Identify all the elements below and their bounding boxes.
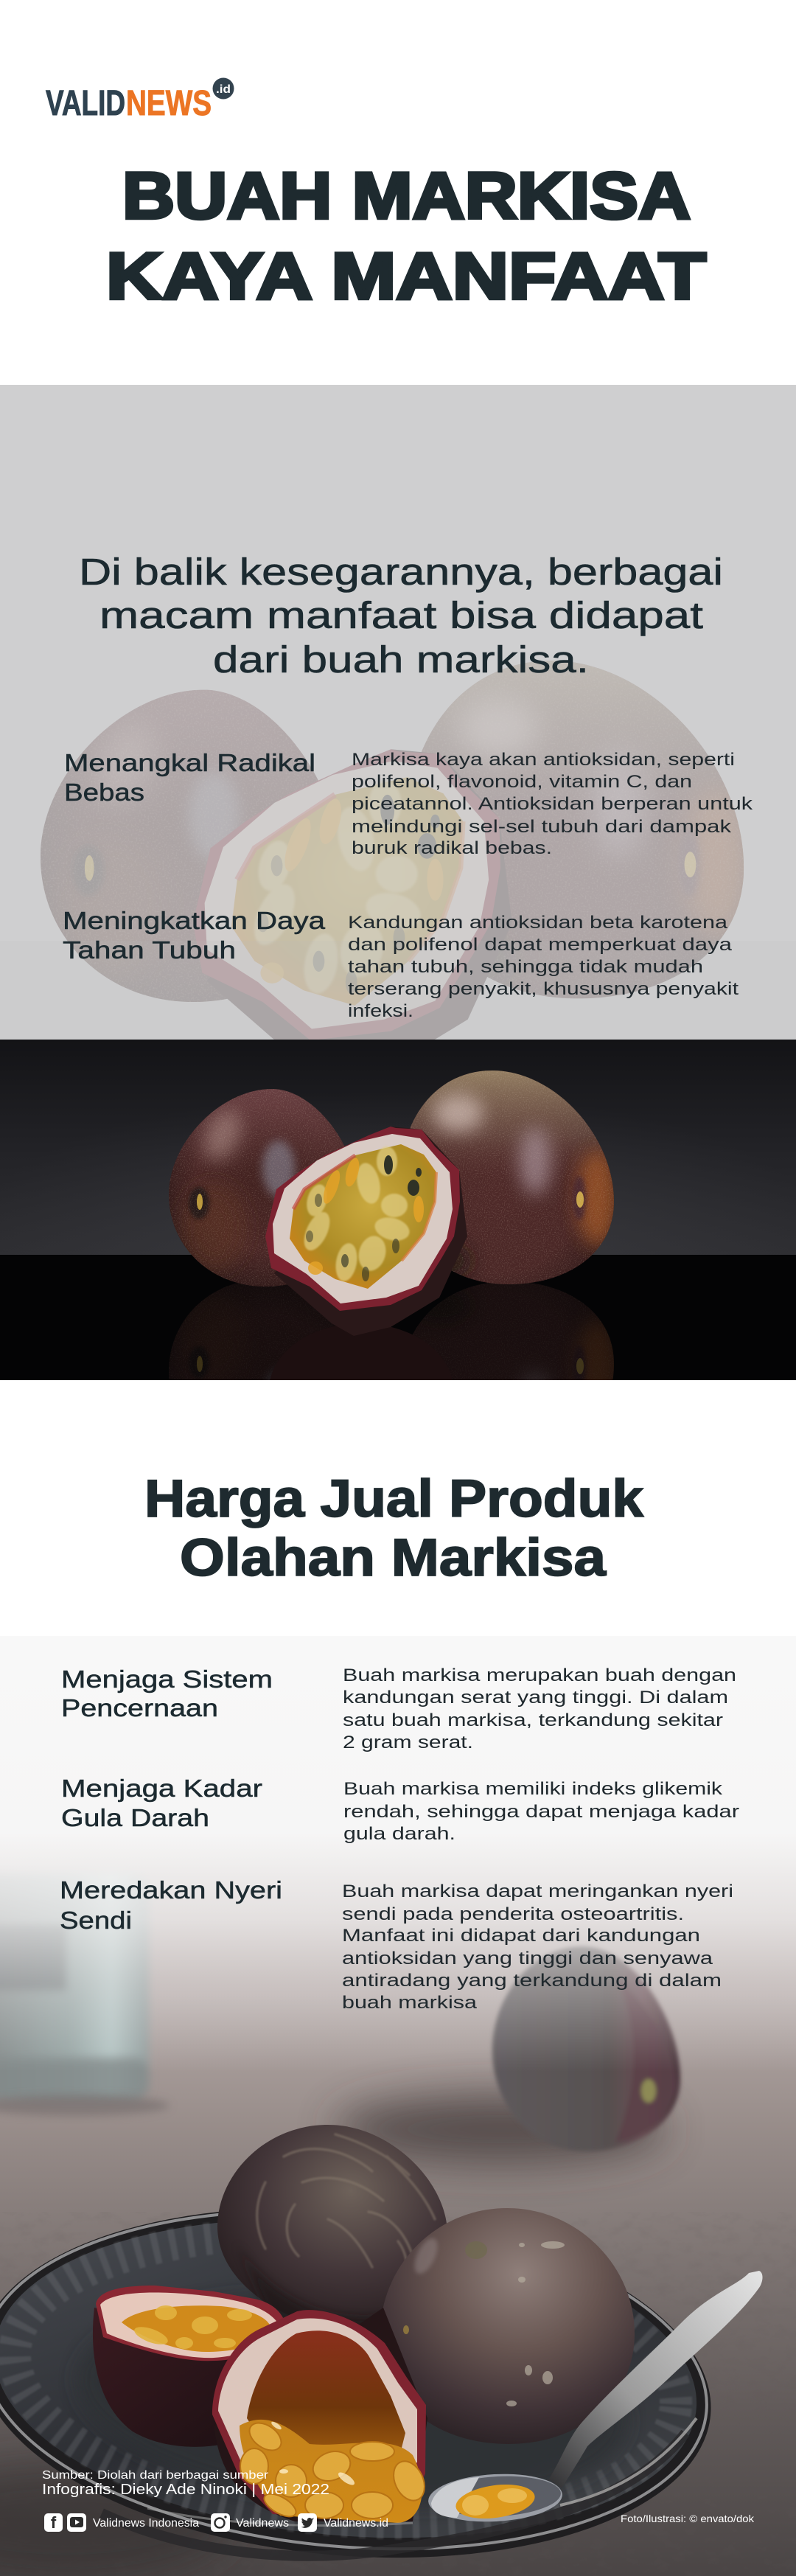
table texture: [0, 2212, 796, 2576]
intro text: macam manfaat bisa didapat: [100, 594, 703, 636]
item body: Meningkatkan Daya Tahan Tubuh: infeksi.: [348, 1001, 413, 1021]
item body: Menjaga Kadar Gula Darah: Buah markisa memiliki indeks glikemik: [343, 1779, 723, 1799]
item heading: Meningkatkan Daya Tahan Tubuh: Meningkatkan Daya: [63, 907, 326, 934]
item body: Meningkatkan Daya Tahan Tubuh: tahan tubuh, sehingga tidak mudah: [348, 957, 703, 977]
blurred glass jar: [0, 1873, 149, 2101]
social: Validnews.id: Validnews.id: [324, 2517, 388, 2530]
logo: Validnews.id: [46, 78, 234, 123]
item body: Menjaga Kadar Gula Darah: rendah, sehingga dapat menjaga kadar: [343, 1802, 739, 1822]
intro text: Di balik kesegarannya, berbagai: [79, 551, 723, 593]
item body: Menjaga Sistem Pencernaan: Buah markisa merupakan buah dengan: [343, 1665, 736, 1685]
cut half fruit, centre: [212, 2308, 430, 2523]
intro text: dari buah markisa.: [213, 638, 589, 680]
item body: Meningkatkan Daya Tahan Tubuh: [348, 913, 739, 1021]
logo badge .id: .id: [216, 83, 231, 96]
item heading: Meningkatkan Daya Tahan Tubuh: [63, 907, 326, 964]
photo credit: Foto/Ilustrasi: © envato/dok: [621, 2513, 755, 2524]
title: [106, 159, 706, 313]
item body: Meredakan Nyeri Sendi: [342, 1881, 733, 2013]
item body: Menjaga Kadar Gula Darah: [343, 1779, 739, 1844]
item heading: Meredakan Nyeri Sendi: Meredakan Nyeri: [60, 1876, 282, 1904]
black table: [0, 1255, 796, 1380]
item body: Menangkal Radikal Bebas: polifenol, flavonoid, vitamin C, dan: [352, 772, 692, 792]
item heading: Menjaga Sistem Pencernaan: Pencernaan: [61, 1694, 218, 1722]
item body: Menjaga Sistem Pencernaan: 2 gram serat.: [343, 1733, 473, 1752]
item heading: Menjaga Kadar Gula Darah: [61, 1775, 262, 1831]
item heading: Menjaga Sistem Pencernaan: [61, 1665, 273, 1722]
icon: youtube: [67, 2513, 86, 2532]
panel: manfaat on washed-out fruit photo: [0, 385, 796, 1080]
item body: Menjaga Kadar Gula Darah: gula darah.: [343, 1824, 455, 1844]
item heading: Menjaga Sistem Pencernaan: Menjaga Sistem: [61, 1665, 273, 1693]
title: KAYA MANFAAT: [106, 239, 706, 313]
plate: [0, 2179, 725, 2576]
item heading: Menangkal Radikal Bebas: [64, 749, 315, 806]
item body: Meredakan Nyeri Sendi: antiradang yang terkandung di dalam: [342, 1971, 722, 1991]
blurred back fruit: [492, 1946, 680, 2151]
item body: Meningkatkan Daya Tahan Tubuh: terserang penyakit, khususnya penyakit: [348, 979, 739, 999]
item body: Menangkal Radikal Bebas: buruk radikal bebas.: [352, 838, 552, 858]
item heading: Meningkatkan Daya Tahan Tubuh: Tahan Tubuh: [63, 936, 236, 964]
shadow of back fruit: [335, 2095, 667, 2163]
item body: Menjaga Sistem Pencernaan: satu buah markisa, terkandung sekitar: [343, 1710, 723, 1730]
social: Validnews: Validnews: [236, 2517, 289, 2530]
three passion fruits: [169, 1071, 618, 1336]
title: BUAH MARKISA: [122, 159, 691, 232]
infographic credit: Infografis: Dieky Ade Ninoki | Mei 2022: [42, 2482, 329, 2498]
cut half fruit, left: [93, 2286, 287, 2447]
heading: Harga Jual Produk Olahan Markisa: Harga Jual Produk: [144, 1470, 644, 1528]
table background: [0, 1636, 796, 2576]
item body: Menjaga Sistem Pencernaan: kandungan serat yang tinggi. Di dalam: [343, 1688, 728, 1708]
panel: photo of fruit on plate with faded top: [0, 1636, 796, 2576]
item body: Meredakan Nyeri Sendi: antioksidan yang tinggi dan senyawa: [342, 1949, 713, 1968]
icon: instagram: [211, 2513, 230, 2532]
photo: passion fruit on dark table: [0, 1040, 796, 1495]
item heading: Menjaga Kadar Gula Darah: Gula Darah: [61, 1804, 209, 1831]
item body: Meredakan Nyeri Sendi: buah markisa: [342, 1993, 478, 2013]
item body: Menangkal Radikal Bebas: Markisa kaya akan antioksidan, seperti: [352, 750, 735, 770]
washed fruit photo: [0, 661, 796, 1080]
source credit: Sumber: Diolah dari berbagai sumber: [42, 2469, 269, 2482]
plate front rim: [102, 2433, 685, 2556]
white fade over photo top: [0, 1636, 796, 2072]
panel background: [0, 385, 796, 1040]
icon: twitter: [298, 2513, 317, 2532]
item body: Meredakan Nyeri Sendi: Buah markisa dapat meringankan nyeri: [342, 1881, 733, 1901]
item body: Meningkatkan Daya Tahan Tubuh: Kandungan antioksidan beta karotena: [348, 913, 728, 933]
smooth large fruit: [380, 2208, 635, 2444]
item body: Menjaga Sistem Pencernaan: [343, 1665, 736, 1752]
dark backdrop: [0, 1040, 796, 1255]
item body: Menangkal Radikal Bebas: melindungi sel-sel tubuh dari dampak: [352, 817, 732, 837]
icon: facebook: f: [51, 2513, 57, 2532]
item heading: Meredakan Nyeri Sendi: Sendi: [60, 1907, 132, 1934]
item heading: Menjaga Kadar Gula Darah: Menjaga Kadar: [61, 1775, 262, 1802]
item body: Meningkatkan Daya Tahan Tubuh: dan polifenol dapat memperkuat daya: [348, 935, 733, 955]
item heading: Menangkal Radikal Bebas: Bebas: [64, 779, 144, 806]
wrinkled fruit: [217, 2125, 447, 2344]
logo word VALID: VALID: [46, 84, 125, 123]
reflection of fruit: [169, 1283, 614, 1380]
item body: Menangkal Radikal Bebas: piceatannol. Antioksidan berperan untuk: [352, 794, 753, 814]
icon: facebook: [44, 2513, 63, 2532]
body text column: items over photo: [60, 1665, 739, 2013]
item body: Meredakan Nyeri Sendi: sendi pada penderita osteoartritis.: [342, 1904, 684, 1924]
logo word NEWS: NEWS: [126, 84, 212, 123]
item body: Meredakan Nyeri Sendi: Manfaat ini didapat dari kandungan: [342, 1926, 700, 1946]
item heading: Meredakan Nyeri Sendi: [60, 1876, 282, 1934]
item body: Menangkal Radikal Bebas: [352, 750, 753, 858]
spoon with seeds: [427, 2271, 763, 2525]
intro text: [79, 551, 723, 680]
logo badge .id: [212, 78, 234, 99]
item heading: Menangkal Radikal Bebas: Menangkal Radikal: [64, 749, 315, 776]
social: Validnews Indonesia: Validnews Indonesia: [93, 2517, 199, 2530]
heading: Harga Jual Produk Olahan Markisa: [144, 1470, 644, 1587]
heading: Harga Jual Produk Olahan Markisa: Olahan Markisa: [180, 1529, 607, 1587]
